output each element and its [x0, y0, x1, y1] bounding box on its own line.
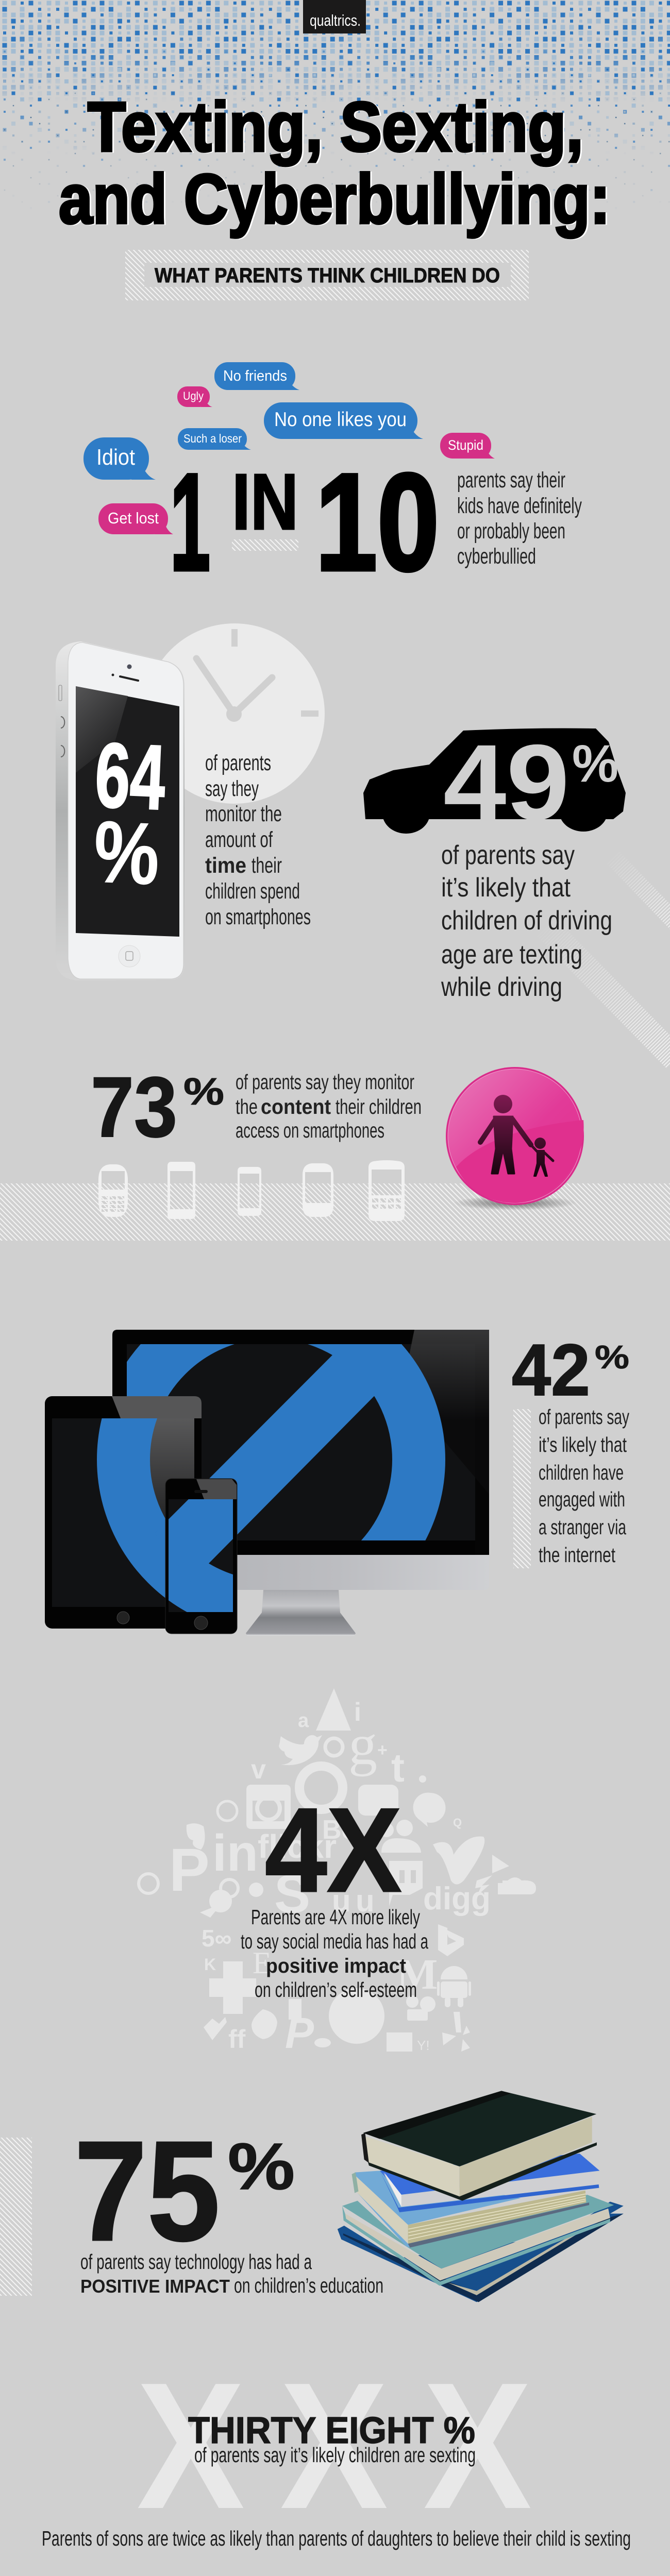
social media icon cloud: in — [212, 1824, 258, 1882]
qualtrics logo tab: qualtrics. — [310, 11, 361, 29]
social media icon cloud: u — [332, 1884, 351, 1918]
icon: clock — [144, 623, 325, 804]
text: 1 in 10 description — [457, 468, 582, 569]
73% statistic: 73 — [91, 1060, 177, 1155]
social media icon cloud: M — [397, 1951, 438, 1998]
text: 73% description: their children — [336, 1095, 422, 1118]
social media icon cloud: v — [251, 1755, 266, 1785]
text: 64% description: say they — [205, 776, 259, 801]
text: 64% description: time — [205, 853, 246, 878]
social media icon cloud: flickr — [258, 1828, 337, 1865]
73% statistic: % — [183, 1070, 224, 1113]
title: Texting, Sexting, — [88, 88, 583, 166]
social media icon cloud: t — [391, 1745, 405, 1790]
bubble: Ugly: Ugly — [183, 389, 204, 402]
1 IN 10 statistic: 1 — [170, 445, 210, 599]
XXX background letters: X — [423, 2345, 533, 2547]
4X statistic: 4X — [265, 1784, 401, 1917]
bubble: Stupid — [440, 433, 495, 459]
text: 73% description — [236, 1070, 422, 1142]
qualtrics logo tab — [303, 0, 366, 33]
social media icon cloud: + — [377, 1740, 388, 1760]
bubble: No friends — [214, 362, 299, 390]
text: 64% description: of parents — [205, 751, 271, 775]
text: 73% description: of parents say they monitor — [236, 1070, 414, 1094]
speech bubbles: insults — [83, 362, 495, 534]
text: 64% description: amount of — [205, 827, 273, 852]
bubble: Stupid: Stupid — [448, 437, 483, 453]
text: 64% description — [205, 751, 311, 929]
bubble: Idiot — [83, 437, 156, 480]
social media icon cloud — [139, 1688, 536, 2057]
text: 73% description: the — [236, 1095, 258, 1118]
social media icon cloud: E — [253, 1946, 272, 1980]
text: 4X description: Parents are 4X more likely — [251, 1905, 420, 1929]
XXX background letters — [137, 2345, 533, 2547]
bubble: Get lost — [98, 503, 173, 534]
icon: white smartphone with 64%: 64 — [93, 723, 167, 829]
text: 42% description: of parents say — [539, 1405, 629, 1429]
social media icon cloud: g — [348, 1713, 377, 1777]
social media icon cloud: a — [298, 1710, 309, 1732]
icon: tablet — [45, 1396, 202, 1629]
top dot pattern — [0, 0, 670, 216]
XXX background letters: X — [280, 2345, 389, 2547]
text: 49% description: children of driving — [441, 906, 612, 936]
icon: white smartphone with 64% — [56, 641, 185, 980]
text: 75% description: POSITIVE IMPACT — [80, 2276, 230, 2297]
bubble: Get lost: Get lost — [108, 509, 159, 527]
social media icon cloud: Y! — [417, 2038, 430, 2053]
XXX background letters: X — [137, 2345, 246, 2547]
text: 64% description: their — [252, 853, 282, 878]
text: 64% description: on smartphones — [205, 905, 311, 929]
heading: thirty eight percent: THIRTY EIGHT % — [188, 2410, 475, 2451]
text: 49% description — [441, 840, 612, 1002]
bubble: No friends: No friends — [223, 368, 287, 384]
dark blue bottom book — [338, 2201, 624, 2302]
text: 42% description: the internet — [539, 1543, 615, 1567]
text: 64% description: monitor the — [205, 802, 282, 826]
bubble: No one likes you — [264, 402, 423, 439]
text: 42% description: engaged with — [539, 1487, 625, 1511]
icon: keypad phone — [98, 1164, 128, 1217]
social media icon cloud: u — [356, 1884, 375, 1918]
text: 42% description: a stranger via — [539, 1515, 626, 1539]
devices with blue Q logo — [45, 1312, 489, 1636]
text: 49% description: it’s likely that — [441, 873, 571, 903]
text: 49% description: while driving — [441, 972, 562, 1002]
text: 42% description: children have — [539, 1461, 624, 1484]
dark green top book — [368, 2142, 597, 2201]
text: 73% description: access on smartphones — [236, 1118, 384, 1142]
social media icon cloud: 5∞ — [202, 1925, 231, 1952]
social media icon cloud: digg — [423, 1881, 491, 1917]
text: 1 in 10 description: cyberbullied — [457, 544, 536, 569]
icon: car silhouette with 49% — [363, 723, 626, 842]
icon: car silhouette with 49%: % — [572, 734, 618, 793]
social media icon cloud: i — [354, 1698, 361, 1726]
text: 75% description: on children’s education — [234, 2274, 383, 2297]
light blue book — [355, 2171, 521, 2225]
social media icon cloud: Q — [453, 1816, 462, 1829]
icon: parental control badge — [446, 1067, 584, 1210]
text: 1 in 10 description: parents say their — [457, 468, 565, 493]
75% statistic: 75 — [74, 2112, 220, 2270]
bubble: Idiot: Idiot — [96, 445, 135, 470]
social media icon cloud: P — [169, 1836, 210, 1904]
subtitle banner: WHAT PARENTS THINK CHILDREN DO — [155, 264, 500, 287]
social media icon cloud: ff — [228, 2025, 246, 2054]
text: 4X description: positive impact — [266, 1955, 406, 1977]
icon: smartphone four — [303, 1163, 333, 1217]
1 IN 10 statistic — [170, 445, 439, 599]
text: 64% description: children spend — [205, 879, 300, 904]
text: 1 in 10 description: kids have definitely — [457, 494, 582, 518]
bright blue book — [380, 2154, 599, 2195]
icon: white smartphone with 64%: % — [92, 803, 161, 904]
subtitle banner — [125, 250, 529, 300]
42% statistic: 42 — [512, 1329, 590, 1411]
text: 75% description: of parents say technology has had a — [80, 2250, 312, 2274]
bubble: Such a loser — [178, 428, 251, 450]
bubble: No one likes you: No one likes you — [274, 409, 407, 431]
icon: smartphone two — [167, 1162, 195, 1219]
social media icon cloud: S — [274, 1864, 310, 1924]
text: 75% description — [80, 2250, 383, 2297]
hatched vertical bar — [513, 1409, 531, 1568]
text: 73% description: content — [261, 1095, 331, 1118]
social media icon cloud: Be — [322, 1815, 356, 1845]
social media icon cloud: K — [204, 1955, 216, 1974]
bubble: Ugly — [177, 386, 212, 407]
bubble: Such a loser: Such a loser — [183, 432, 242, 445]
text: 4X description: to say social media has had a — [241, 1929, 428, 1953]
1 IN 10 statistic: 10 — [315, 445, 439, 599]
text: 49% description: age are texting — [441, 940, 582, 970]
icon: keyboard phone — [368, 1160, 405, 1221]
hatched side bar — [0, 2138, 32, 2296]
icon: small phone — [165, 1479, 237, 1634]
social media icon cloud: P — [285, 2009, 314, 2057]
title — [59, 88, 610, 238]
icon: stack of books — [338, 2091, 624, 2302]
42% statistic — [512, 1329, 629, 1411]
text: 42% description: it’s likely that — [539, 1433, 627, 1456]
decoration: tire tracks — [546, 858, 670, 1059]
text: sexting description: of parents say it’s likely children are sexting — [194, 2443, 476, 2467]
text: 49% description: of parents say — [441, 840, 575, 870]
1 IN 10 statistic: IN — [232, 457, 298, 546]
teal book — [342, 2195, 614, 2268]
icon: desktop monitor — [112, 1312, 489, 1636]
text: 42% description — [539, 1405, 629, 1567]
text: 4X description: on children’s self-esteem — [255, 1978, 417, 2002]
hatched band behind phones — [0, 1183, 670, 1241]
text: 1 in 10 description: or probably been — [457, 519, 565, 544]
icon: car silhouette with 49%: 49 — [443, 723, 569, 842]
42% statistic: % — [595, 1338, 629, 1376]
75% statistic: % — [228, 2130, 295, 2204]
text: 4X description — [241, 1905, 428, 2002]
icons: row of phones — [98, 1160, 405, 1221]
icon: smartphone three — [238, 1167, 261, 1216]
